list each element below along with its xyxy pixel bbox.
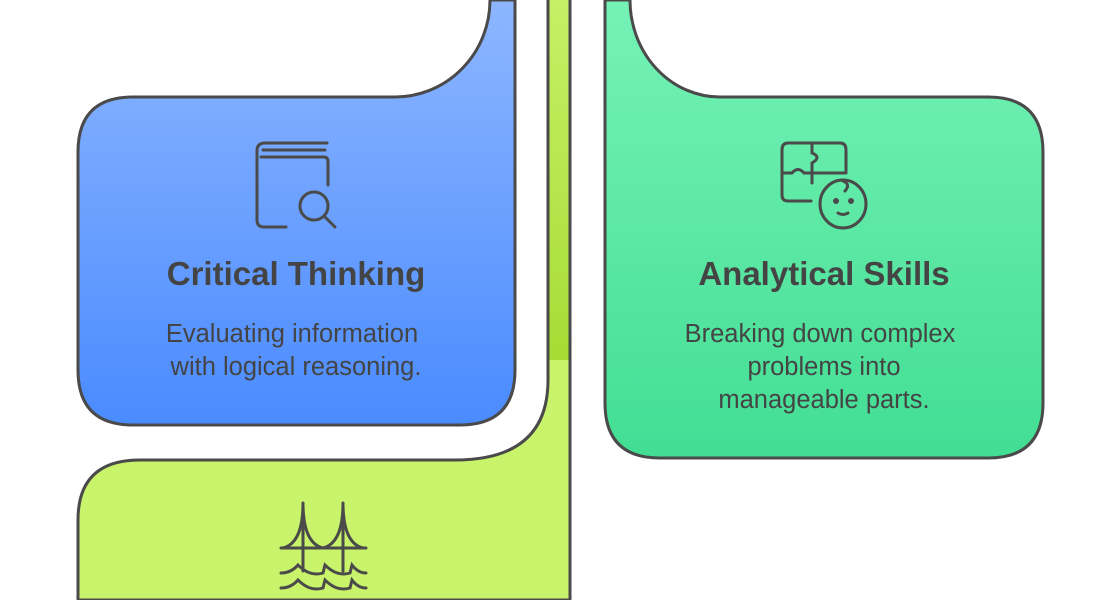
heading: Critical Thinking: Critical Thinking <box>167 255 425 292</box>
text: description: Breaking down complex <box>685 320 956 348</box>
text: description: Evaluating information <box>166 320 418 348</box>
panel: critical thinking <box>78 0 515 425</box>
panel: analytical skills <box>605 0 1043 458</box>
text: description: manageable parts. <box>718 386 930 414</box>
icon: bridge <box>281 503 366 589</box>
icon: puzzle face <box>782 143 866 228</box>
icon: book search <box>257 143 335 227</box>
heading: Analytical Skills: Analytical Skills <box>698 255 950 292</box>
text: description: problems into <box>747 353 901 381</box>
text: description: with logical reasoning. <box>170 353 421 381</box>
panel: lime card <box>78 0 570 600</box>
